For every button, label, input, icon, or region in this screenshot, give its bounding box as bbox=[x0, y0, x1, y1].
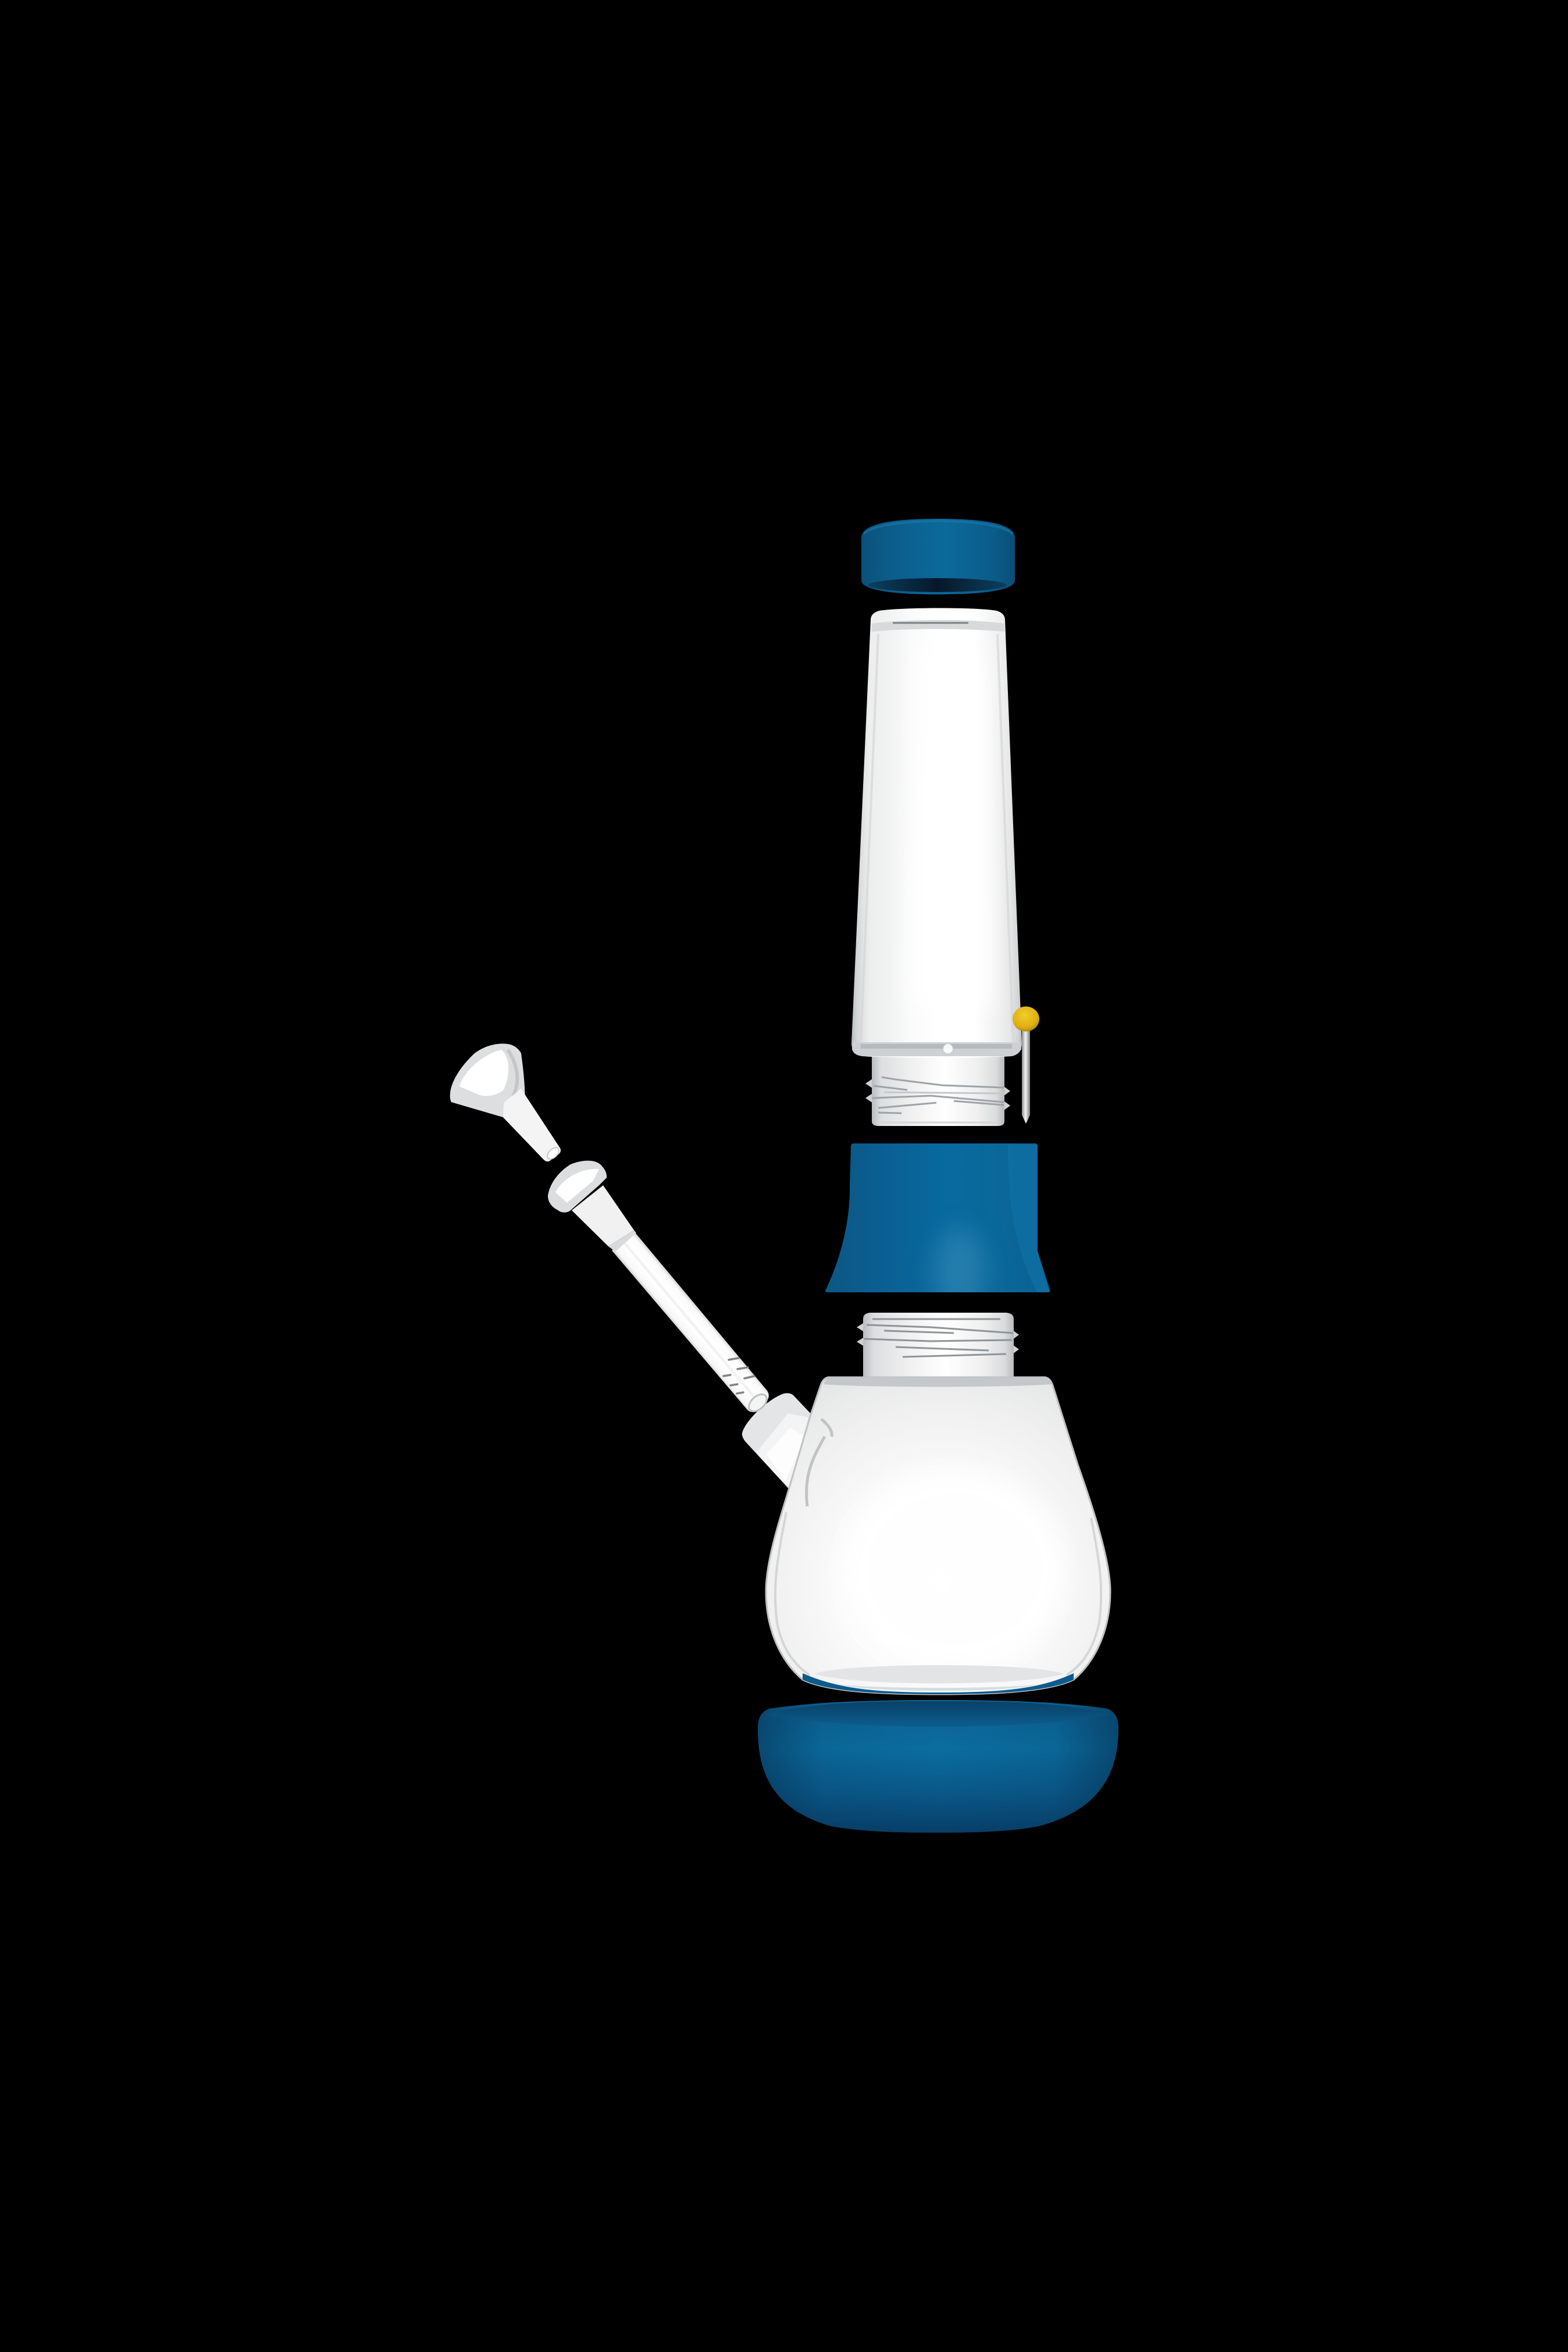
stem tube bbox=[612, 1231, 769, 1412]
tube body bbox=[851, 608, 1022, 1058]
blue base dish bbox=[758, 1700, 1118, 1833]
yellow pin bbox=[1013, 1006, 1039, 1124]
bowl frosted joint bbox=[503, 1089, 561, 1161]
stem end opening bbox=[746, 1391, 770, 1414]
tube top rim bbox=[872, 620, 1004, 632]
tube inner wall lines bbox=[861, 634, 1013, 1041]
flask shoulder rim bbox=[824, 1377, 1052, 1387]
stem disc inner bbox=[555, 1169, 599, 1203]
blue reflection of dish bbox=[803, 1673, 1074, 1694]
sleeve pin groove bbox=[1008, 1145, 1049, 1292]
upper glass tube bbox=[851, 608, 1022, 1126]
tube soft highlight bbox=[910, 651, 989, 1006]
flask internal joint bbox=[807, 1419, 832, 1506]
stem diffuser slits bbox=[724, 1358, 754, 1394]
threaded neck of flask bbox=[857, 1313, 1019, 1381]
bowl inner white bbox=[459, 1050, 508, 1096]
flask inner side contour bbox=[775, 1512, 810, 1675]
lid opening bbox=[868, 578, 1007, 592]
flask side socket bbox=[742, 1393, 814, 1492]
dish opening bbox=[765, 1701, 1111, 1727]
bowl glass reflections bbox=[508, 1050, 517, 1096]
flask inner glow bbox=[843, 1471, 1064, 1669]
exploded product illustration bbox=[450, 519, 1118, 1833]
flask floor bbox=[814, 1665, 1063, 1683]
pin head bbox=[1013, 1006, 1039, 1032]
blue top lid bbox=[861, 519, 1015, 594]
pin shaft bbox=[1022, 1031, 1030, 1124]
glass downstem bbox=[548, 1161, 770, 1414]
stem collar bbox=[608, 1230, 636, 1252]
bowl tip opening bbox=[546, 1146, 561, 1161]
glass flask body bbox=[766, 1377, 1110, 1694]
stem frosted taper bbox=[572, 1185, 634, 1246]
tube bottom rim bbox=[852, 1042, 1021, 1056]
threaded neck of tube bbox=[865, 1056, 1010, 1126]
stem flared disc bbox=[548, 1161, 607, 1213]
blue middle sleeve bbox=[825, 1143, 1050, 1292]
floor highlights bbox=[878, 1634, 908, 1644]
glass bowl bbox=[450, 1044, 561, 1161]
sleeve highlight bbox=[933, 1227, 986, 1314]
